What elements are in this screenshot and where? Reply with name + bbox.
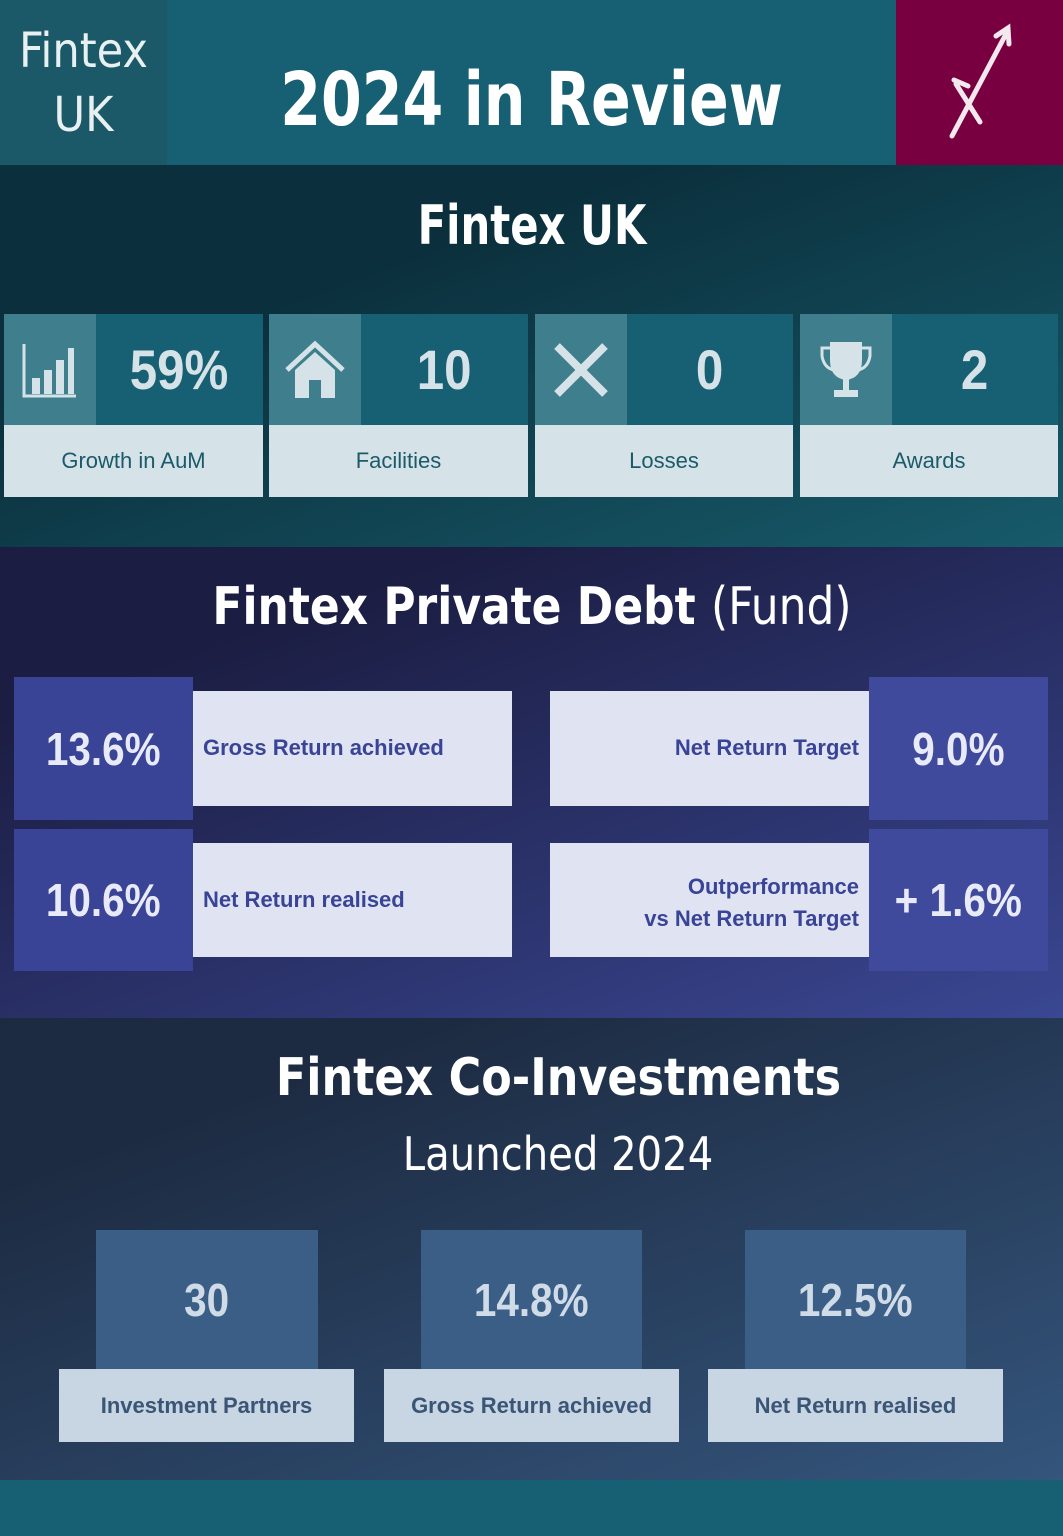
card: growth: Growth in AuM — [61, 448, 206, 473]
stat: net return: Net Return realised — [755, 1392, 956, 1418]
icon: arrow logo — [896, 0, 1063, 165]
main title: 2024 in Review — [280, 57, 783, 143]
stat: gross return: Gross Return achieved — [411, 1392, 652, 1418]
stat: net return: 12.5% — [798, 1274, 913, 1326]
heading: Fintex Co-Investments — [276, 1048, 841, 1108]
subtitle: Launched 2024 — [403, 1127, 714, 1181]
stat: net return target: 9.0% — [912, 722, 1005, 774]
stat cards — [4, 314, 1058, 497]
card: facilities: Facilities — [356, 448, 441, 473]
stat: net return target — [550, 677, 1048, 820]
stat: net return realised: Net Return realised — [203, 887, 405, 912]
heading: Fintex Private Debt (Fund) — [212, 577, 851, 637]
stat: net return realised: 10.6% — [46, 874, 161, 926]
card: facilities — [269, 314, 528, 497]
stat: gross return — [384, 1230, 679, 1442]
logo text box: UK — [54, 86, 113, 142]
heading: Fintex UK — [417, 194, 646, 256]
logo text box — [0, 0, 167, 165]
stat: outperformance: Outperformance — [688, 874, 859, 899]
logo text box: Fintex — [19, 22, 148, 78]
stat: gross return: 13.6% — [46, 722, 161, 774]
card: growth — [4, 314, 263, 497]
stat: net return realised — [14, 829, 512, 971]
stat: gross return: Gross Return achieved — [203, 735, 444, 760]
card: growth: 59% — [130, 338, 229, 401]
panel: Fintex UK — [0, 165, 1063, 547]
stat: gross return: 14.8% — [474, 1274, 589, 1326]
stat: investment partners: Investment Partners — [101, 1392, 312, 1418]
card: losses: Losses — [629, 448, 699, 473]
header bar — [0, 0, 1063, 165]
stat: net return target: Net Return Target — [675, 735, 859, 760]
stat: outperformance: vs Net Return Target — [644, 906, 859, 931]
stat: outperformance: + 1.6% — [895, 874, 1022, 926]
card: awards — [800, 314, 1058, 497]
card: losses: 0 — [696, 338, 724, 401]
card: awards: Awards — [893, 448, 965, 473]
card: facilities: 10 — [417, 338, 472, 401]
panel: Fintex Private Debt — [0, 547, 1063, 1018]
stat: net return — [708, 1230, 1003, 1442]
panel: Fintex Co-Investments — [0, 1018, 1063, 1480]
stat: investment partners — [59, 1230, 354, 1442]
card: losses — [535, 314, 793, 497]
stat: investment partners: 30 — [184, 1274, 230, 1326]
footer bar — [0, 1480, 1063, 1536]
stat: outperformance — [550, 829, 1048, 971]
stat: gross return — [14, 677, 512, 820]
card: awards: 2 — [961, 338, 989, 401]
